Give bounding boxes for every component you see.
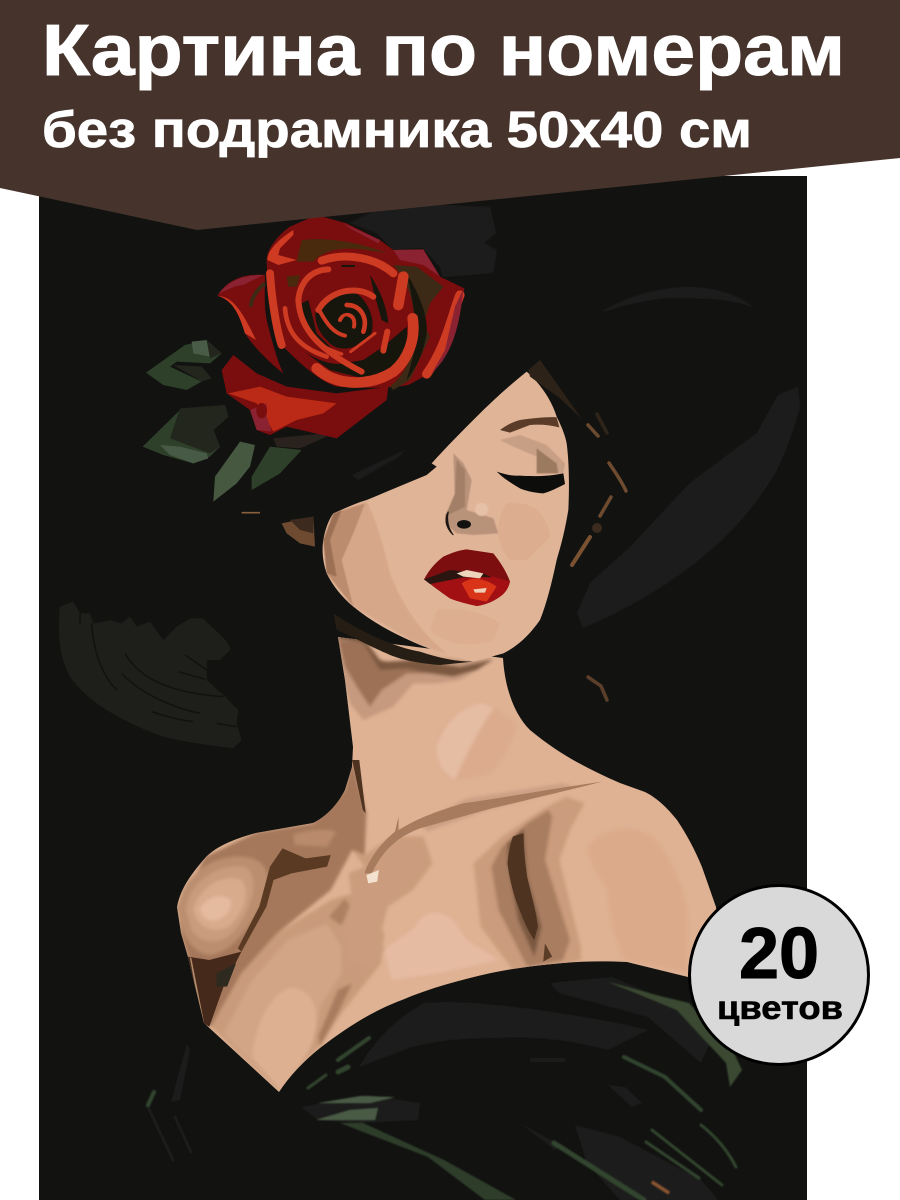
loose hair strands [572,414,626,700]
neck shading [338,637,493,778]
colour count badge [690,886,868,1064]
badge circle [690,886,868,1064]
face base [323,372,569,662]
header banner [0,0,900,230]
hair line [528,360,598,437]
dark folds [171,977,718,1200]
soft face shading [323,435,565,653]
hat brush strokes [350,203,800,628]
leaves [143,340,327,502]
painting background [39,176,807,1200]
eyebrow [500,417,559,433]
banner shape [0,0,900,230]
chin shadow on neck [333,613,473,665]
skin base [177,637,725,1092]
nose shadow [445,453,498,535]
main bloom [267,215,464,388]
shoulder and chest shading [177,760,688,1092]
subtitle: без подрамника 50х40 см [42,101,752,158]
small stem mark [242,510,260,515]
face [282,360,598,665]
nostrils [446,512,453,535]
title: Картина по номерам [42,11,845,91]
closed eye [497,472,565,493]
dress folds [148,977,742,1200]
left background brush stroke [59,602,242,748]
ear [282,517,315,547]
eye socket shading [500,435,565,473]
badge label: цветов [717,989,843,1026]
lips [424,549,510,606]
number: 20 [739,914,819,994]
green highlights [148,1038,736,1200]
rose flower [143,215,464,513]
bottom petal [222,355,388,438]
neck and shoulders [177,620,725,1092]
orange highlights [270,257,460,383]
crisp body details [188,760,602,1027]
left petal [217,275,283,373]
painting: woman in hat with rose [39,176,807,1200]
dark inner folds [390,265,443,390]
soft skin shading [177,620,688,1092]
cheek shading [342,502,444,652]
